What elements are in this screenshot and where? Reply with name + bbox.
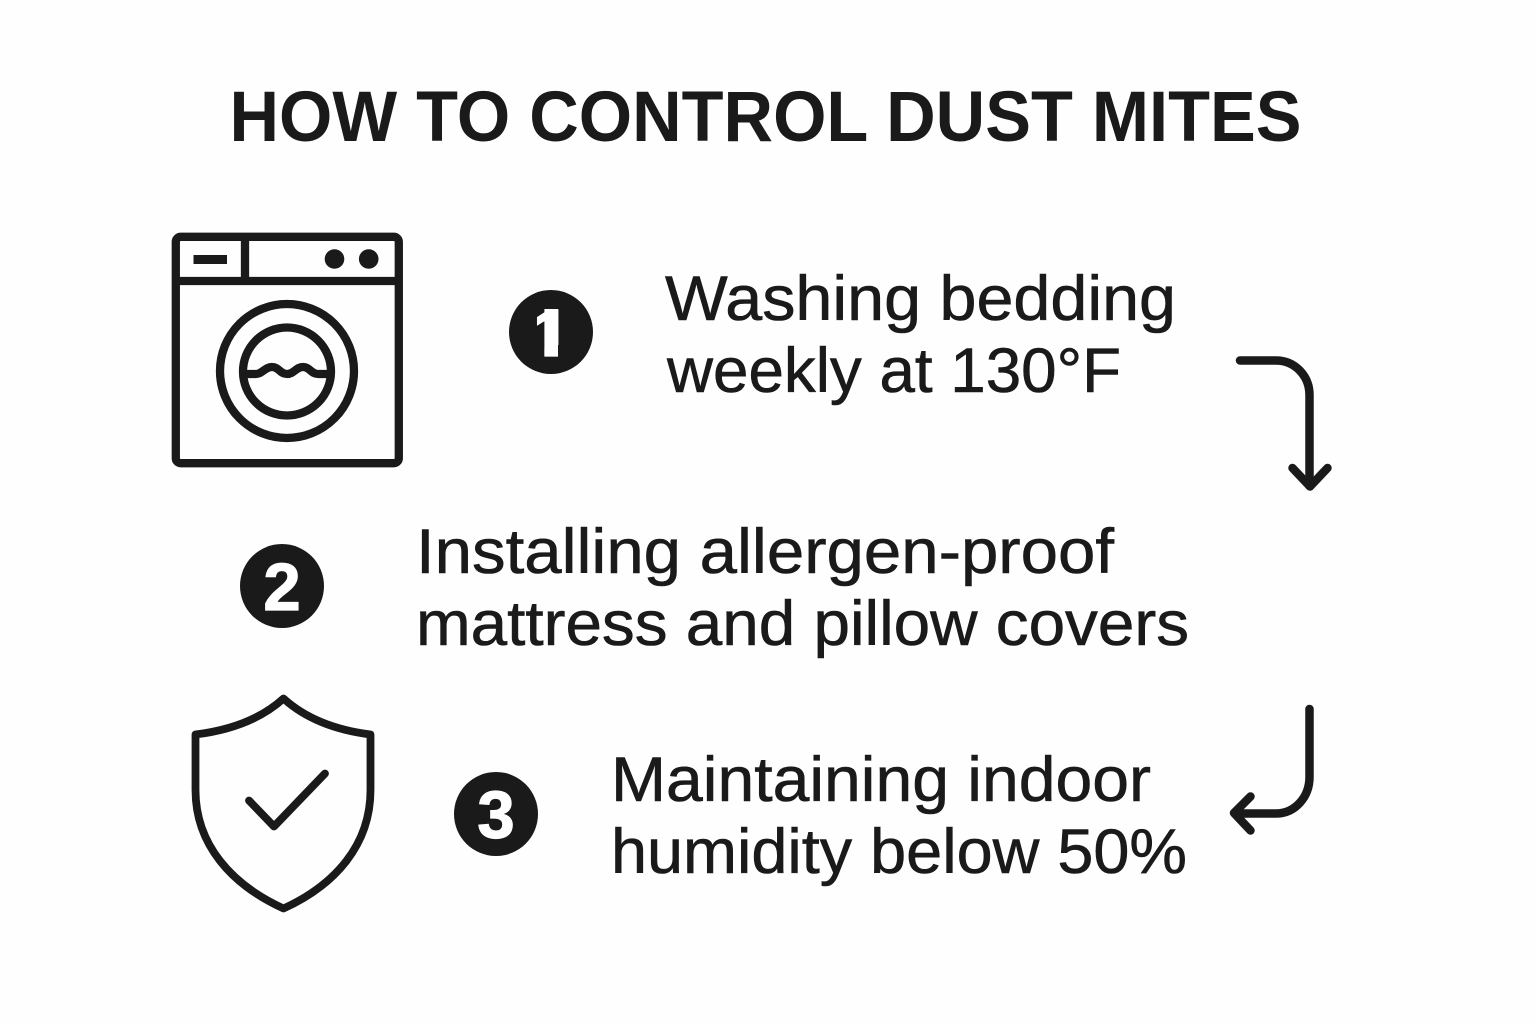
- step 1 number badge: [509, 290, 593, 374]
- icon: washing machine: [176, 237, 399, 463]
- step 1 text: weekly at 130°F: [666, 336, 1121, 406]
- step 2 text: Installing allergen-proof: [416, 517, 1114, 587]
- step 1 text: Washing bedding: [665, 264, 1176, 334]
- icon: shield with check: [196, 698, 370, 908]
- step 1 number badge: 1: [533, 296, 570, 371]
- arrow: step 2 to step 3: [1234, 709, 1310, 830]
- step 3 number badge: 3: [477, 778, 515, 853]
- step 2 number badge: [240, 544, 324, 628]
- step 2 number badge: 2: [263, 550, 301, 625]
- title: HOW TO CONTROL DUST MITES: [230, 78, 1302, 157]
- step 2 text: mattress and pillow covers: [416, 589, 1189, 659]
- step 1 text: [665, 264, 1176, 406]
- step 3 number badge: [454, 772, 538, 856]
- step 3 text: [611, 745, 1187, 887]
- step 2 text: [416, 517, 1189, 659]
- step 3 text: humidity below 50%: [611, 817, 1187, 887]
- arrow: step 1 to step 2: [1240, 360, 1328, 486]
- step 3 text: Maintaining indoor: [611, 745, 1151, 815]
